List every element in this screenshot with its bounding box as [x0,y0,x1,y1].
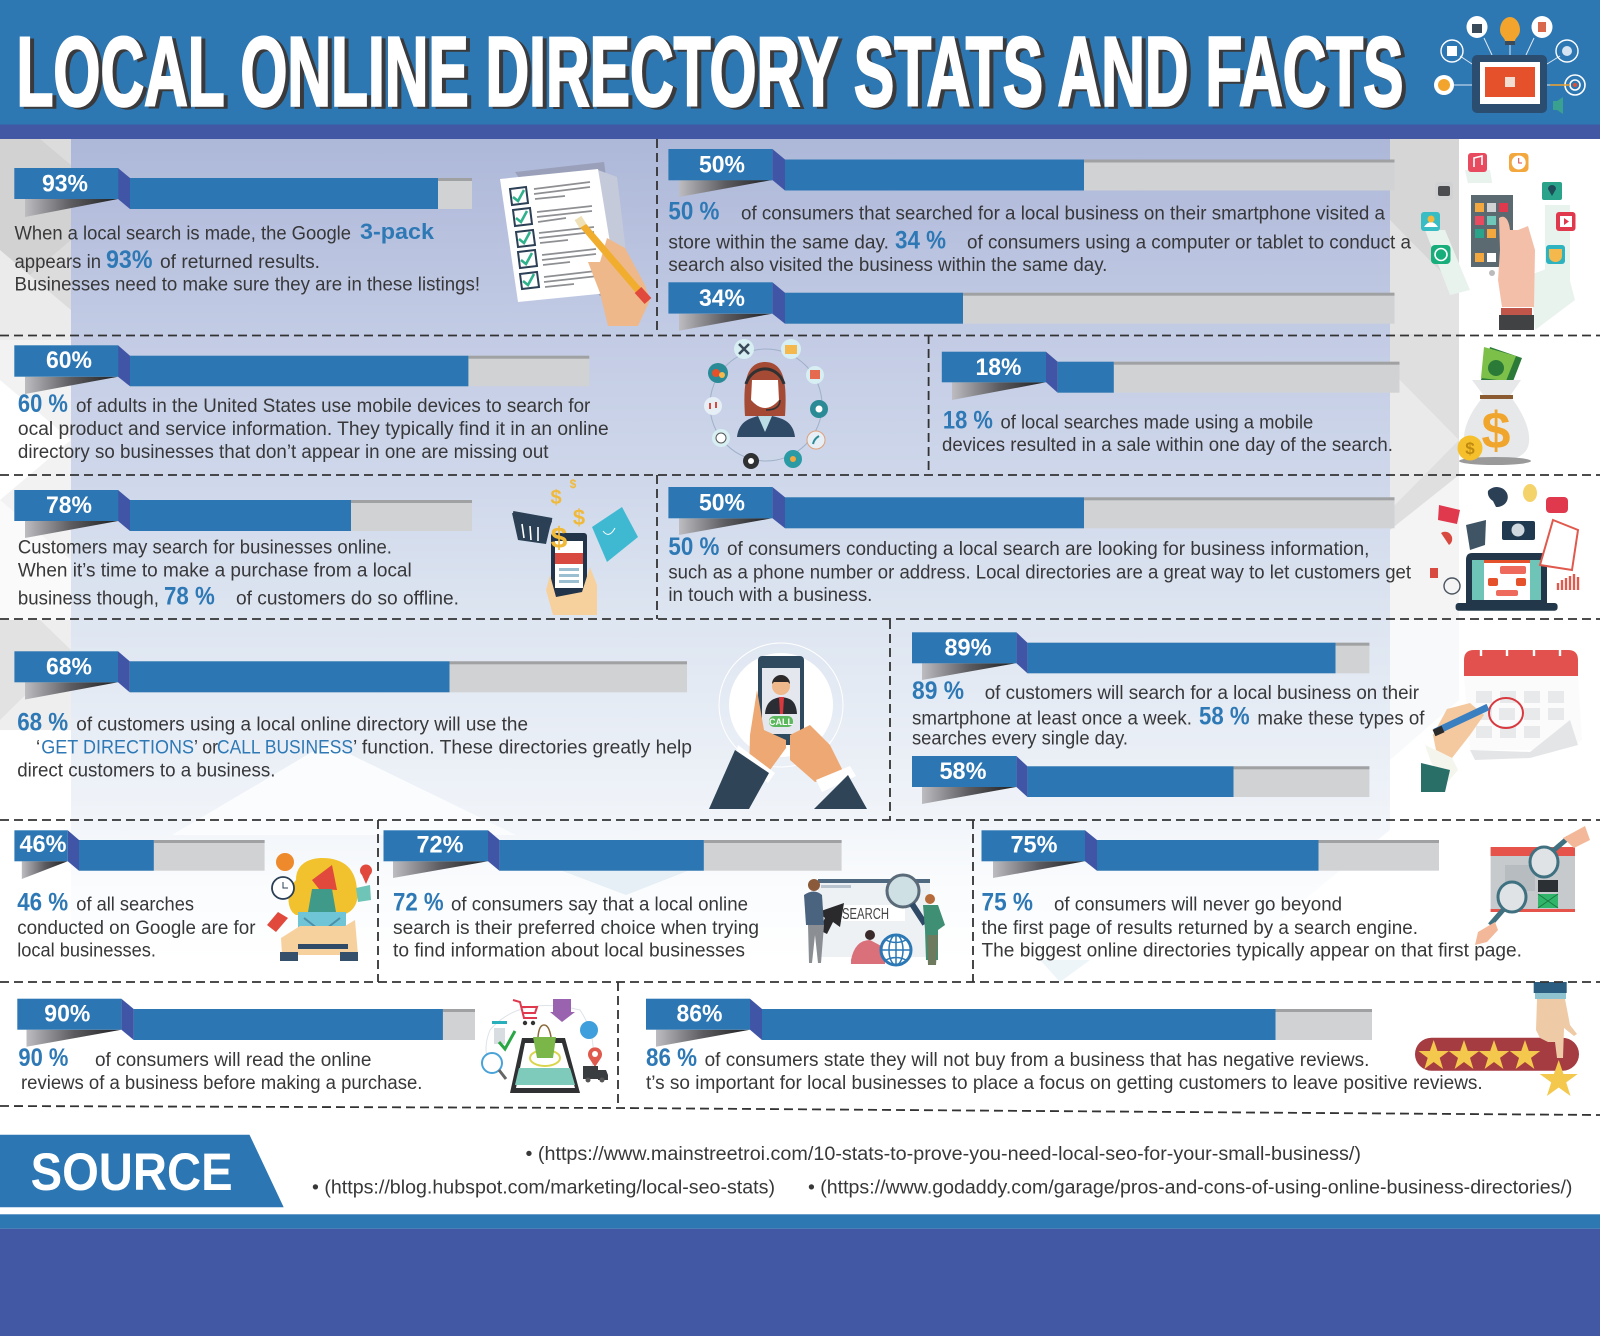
icon: search people [804,875,945,965]
bar: 72%: 72% [416,832,464,858]
icon: phone with basket and bag [512,477,638,615]
bar: 78% [14,490,472,538]
text: google local searches: local businesses. [17,941,156,962]
icon: phone with basket and bag: $ [550,487,562,509]
text: weekly searches: smartphone at least once a week. [912,708,1192,729]
icon: support agent with ring [704,339,828,469]
bar: 50%: 50% [699,152,745,178]
text: mobile sales: 18 % [943,406,993,434]
icon: megaphone marketing [267,853,372,961]
bar: 90%: 90% [44,1001,90,1028]
text: weekly searches: 58 % [1199,702,1250,730]
icon: money bag: $ [1482,402,1511,460]
text: directory functions: ‘ [36,737,40,758]
text: business information: 50 % [668,533,719,561]
icon: phone with basket and bag: $ [551,522,568,555]
icon: hands holding phone: CALL [769,717,793,727]
text: google local searches: of all searches [76,895,194,916]
bar: 46% [14,830,265,879]
bar: 75% [982,830,1439,878]
text: first page of results: The biggest online directories typically appear on that first page. [982,941,1522,962]
text: 3-pack: of returned results. [160,252,320,273]
text: same day visits: 50 % [668,197,719,225]
text: online reviews: 90 % [18,1044,68,1072]
text: preferred choice [393,889,759,962]
text: same day visits: of consumers using a computer or tablet to conduct a [967,232,1411,253]
bar: 86% [646,999,1372,1047]
panel: 46 percent [14,830,372,962]
bar: 58%: 58% [940,758,986,785]
text: offline purchases: business though, [18,589,159,610]
icon: money bag [1458,347,1531,465]
icon: header tablet and ideas [1434,16,1585,114]
icon: browser with magnifiers [1475,826,1590,945]
text: first page of results [982,889,1522,962]
icon: phone with basket and bag: $ [570,477,577,491]
icon: calendar and hand [1421,648,1582,792]
text: 3-pack: 93% [106,246,152,274]
panel: 60 percent [14,339,828,469]
source links: • (https://www.mainstreetroi.com/10-stats-to-prove-you-need-local-seo-for-your-small-business/) [526,1144,1361,1165]
text: online reviews: reviews of a business before making a purchase. [21,1073,422,1094]
text: preferred choice: search is their preferred choice when trying [393,918,759,939]
bar: 78%: 78% [46,492,92,519]
text: business information: such as a phone number or address. Local directories are a great way to let customers get [668,562,1412,583]
text: negative reviews [646,1044,1483,1094]
section dividers [0,139,1600,1115]
icon: money bag: $ [1465,439,1475,458]
footer bands [0,1214,1600,1336]
bar: 18% [942,352,1400,400]
text: preferred choice: to find information about local businesses [393,941,745,962]
bar: 34%: 34% [699,285,745,312]
text: directory functions [17,709,692,782]
panel: 86 percent [646,982,1579,1096]
bar: 86%: 86% [676,1001,722,1028]
text: mobile search: 60 % [18,390,68,418]
text: weekly searches: searches every single day. [912,728,1128,749]
panel: 89 and 58 percent [912,632,1582,804]
source ribbon [0,1135,284,1207]
text: mobile search [18,390,609,463]
source links: • (https://www.godaddy.com/garage/pros-and-cons-of-using-online-business-directories/) [808,1177,1572,1198]
text: directory functions: 68 % [17,709,68,737]
text: first page of results: the first page of results returned by a search engine. [982,918,1418,939]
bar: 50% second: 50% [699,490,745,516]
icon: mobile shopping [482,999,608,1093]
panel: 75 percent [982,826,1590,962]
bar: 34% [668,282,1394,331]
text: 3-pack: Businesses need to make sure they are in these listings! [14,275,480,296]
text: 3-pack: When a local search is made, the Google [14,224,351,244]
bar: 75%: 75% [1010,832,1058,858]
text: offline purchases [18,538,459,611]
source links: • (https://blog.hubspot.com/marketing/local-seo-stats) [312,1177,775,1198]
text: mobile sales [942,406,1393,456]
text: same day visits: 34 % [895,226,946,254]
text: business information [668,533,1412,606]
panel: 68 percent [14,643,880,809]
text: mobile search: ocal product and service information. They typically find it in an online [18,419,609,440]
text: google local searches [17,889,256,962]
bar: 68% [14,651,687,700]
icon: hands holding phone [709,643,880,809]
text: preferred choice: 72 % [393,889,444,917]
text: same day visits: of consumers that searched for a local business on their smartphone visited a [741,203,1385,224]
bar: 93% [14,168,472,217]
text: offline purchases: Customers may search for businesses online. [18,538,392,559]
panel: 78 percent [14,477,638,615]
source ribbon: SOURCE [31,1143,233,1202]
text: weekly searches: make these types of [1257,708,1425,729]
text: mobile search: directory so businesses that don’t appear in one are missing out [18,442,549,463]
text: 3-pack [14,219,480,296]
text: mobile search: of adults in the United States use mobile devices to search for [76,396,591,417]
bar: 60% [14,345,589,394]
text: mobile sales: devices resulted in a sale within one day of the search. [942,435,1393,456]
bar: 50% [668,149,1394,197]
text: first page of results: 75 % [982,889,1033,917]
text: offline purchases: When it’s time to make a purchase from a local [18,560,412,581]
bar: 93%: 93% [42,170,88,198]
text: negative reviews: of consumers state they will not buy from a business that has negative reviews. [705,1050,1369,1071]
text: online reviews [18,1044,422,1094]
bar: 89% [912,632,1369,680]
text: 3-pack: 3-pack [360,219,435,244]
text: preferred choice: of consumers say that a local online [451,895,748,916]
panel: 18 percent [942,347,1531,465]
icon: smartphone apps and hand [1421,153,1576,330]
text: offline purchases: 78 % [164,583,215,611]
text: business information: in touch with a business. [668,585,872,606]
panel: 93 percent [14,162,650,326]
bar: 72% [384,830,842,878]
panel: 90 percent [17,999,608,1094]
source links [312,1144,1572,1198]
text: weekly searches: of customers will search for a local business on their [985,683,1420,704]
text: directory functions: direct customers to a business. [17,761,275,782]
text: weekly searches [912,677,1425,749]
text: first page of results: of consumers will never go beyond [1054,895,1342,916]
bar: 89%: 89% [944,634,992,662]
text: directory functions: of customers using a local online directory will use the [76,715,528,736]
bar: 60%: 60% [46,347,92,374]
text: negative reviews: 86 % [646,1044,697,1072]
bar: 18%: 18% [976,354,1022,381]
text: directory functions: ’ or [194,737,219,758]
text: offline purchases: of customers do so offline. [236,589,459,610]
icon: star rating and hand [1415,982,1579,1096]
bar: 58% [912,756,1369,804]
bar: 68%: 68% [46,654,92,680]
icon: phone with basket and bag: $ [573,505,585,530]
text: same day visits [668,197,1411,276]
bar: 46%: 46% [20,831,66,858]
panel: 50 percent business information [668,484,1578,611]
text: 3-pack: appears in [14,252,101,273]
text: same day visits: store within the same day. [668,232,889,253]
text: google local searches: conducted on Google are for [17,918,256,939]
icon: laptop with office items [1430,484,1578,611]
text: mobile sales: of local searches made using a mobile [1000,412,1313,433]
icon: checklist and hand [500,162,650,326]
text: directory functions: GET DIRECTIONS [41,737,194,758]
panel: 50 and 34 percent [668,149,1576,331]
text: directory functions: ’ function. These directories greatly help [353,737,692,758]
text: weekly searches: 89 % [912,677,964,705]
text: directory functions: CALL BUSINESS [217,737,353,758]
text: online reviews: of consumers will read the online [95,1050,371,1071]
text: same day visits: search also visited the business within the same day. [668,255,1107,276]
panel: 72 percent [384,830,945,965]
text: business information: of consumers conducting a local search are looking for business information, [727,539,1369,560]
bar: 90% [17,999,475,1047]
icon: search people: SEARCH [842,906,889,923]
text: google local searches: 46 % [17,889,68,917]
bar: 50% second [668,487,1394,535]
text: negative reviews: t’s so important for local businesses to place a focus on getting customers to leave positive reviews. [646,1073,1483,1094]
header band [0,0,1600,139]
